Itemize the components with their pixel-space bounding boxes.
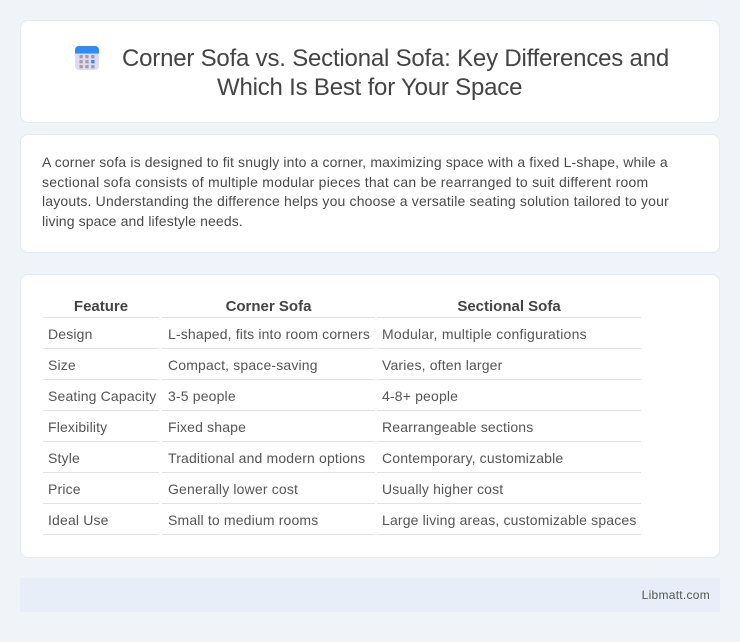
row: Size: Compact, space-saving [168, 357, 318, 373]
row: Ideal Use [48, 512, 636, 528]
row: Design: Design [48, 326, 93, 342]
row: Price: Usually higher cost [382, 481, 503, 497]
row: Style: Contemporary, customizable [382, 450, 563, 466]
row: Price: Price [48, 481, 81, 497]
intro text: sectional sofa consists of multiple modular pieces that can be rearranged to suit different room [42, 174, 648, 190]
row: Price: Generally lower cost [168, 481, 298, 497]
row: Style: Traditional and modern options [168, 450, 365, 466]
row: Size [48, 357, 502, 373]
row: Flexibility: Rearrangeable sections [382, 419, 533, 435]
row: Price [48, 481, 504, 497]
intro text: A corner sofa is designed to fit snugly into a corner, maximizing space with a fixed L-shape, while a [42, 154, 668, 170]
header: Corner Sofa: Corner Sofa [226, 298, 311, 315]
row: Seating Capacity: 3-5 people [168, 388, 236, 404]
intro text [42, 154, 669, 229]
row: Size: Varies, often larger [382, 357, 502, 373]
footer bar [20, 578, 720, 612]
title [122, 45, 669, 101]
row: Seating Capacity: Seating Capacity [48, 388, 156, 404]
row: Size: Size [48, 357, 76, 373]
header: Feature: Feature [74, 298, 128, 315]
row: Style [48, 450, 563, 466]
row: Seating Capacity [48, 388, 458, 404]
row: Ideal Use: Large living areas, customizable spaces [382, 512, 636, 528]
row: Design: Modular, multiple configurations [382, 326, 587, 342]
row: Seating Capacity: 4-8+ people [382, 388, 458, 404]
panel: introduction [20, 134, 720, 253]
row: Ideal Use: Small to medium rooms [168, 512, 318, 528]
title: Which Is Best for Your Space [217, 74, 522, 101]
intro text: living space and lifestyle needs. [42, 213, 243, 229]
intro text: layouts. Understanding the difference helps you choose a versatile seating solution tailored to your [42, 193, 669, 209]
row: Design: L-shaped, fits into room corners [168, 326, 370, 342]
footer credit: Libmatt.com [642, 588, 710, 602]
header: Sectional Sofa: Sectional Sofa [457, 298, 561, 315]
row: Design [48, 326, 587, 342]
icon: calendar [75, 46, 99, 70]
row: Flexibility: Flexibility [48, 419, 107, 435]
row: Flexibility [48, 419, 533, 435]
panel: title header [20, 20, 720, 123]
row: Ideal Use: Ideal Use [48, 512, 109, 528]
row: Style: Style [48, 450, 80, 466]
panel: comparison table [20, 274, 720, 558]
row: Flexibility: Fixed shape [168, 419, 246, 435]
title: Corner Sofa vs. Sectional Sofa: Key Differences and [122, 45, 669, 72]
